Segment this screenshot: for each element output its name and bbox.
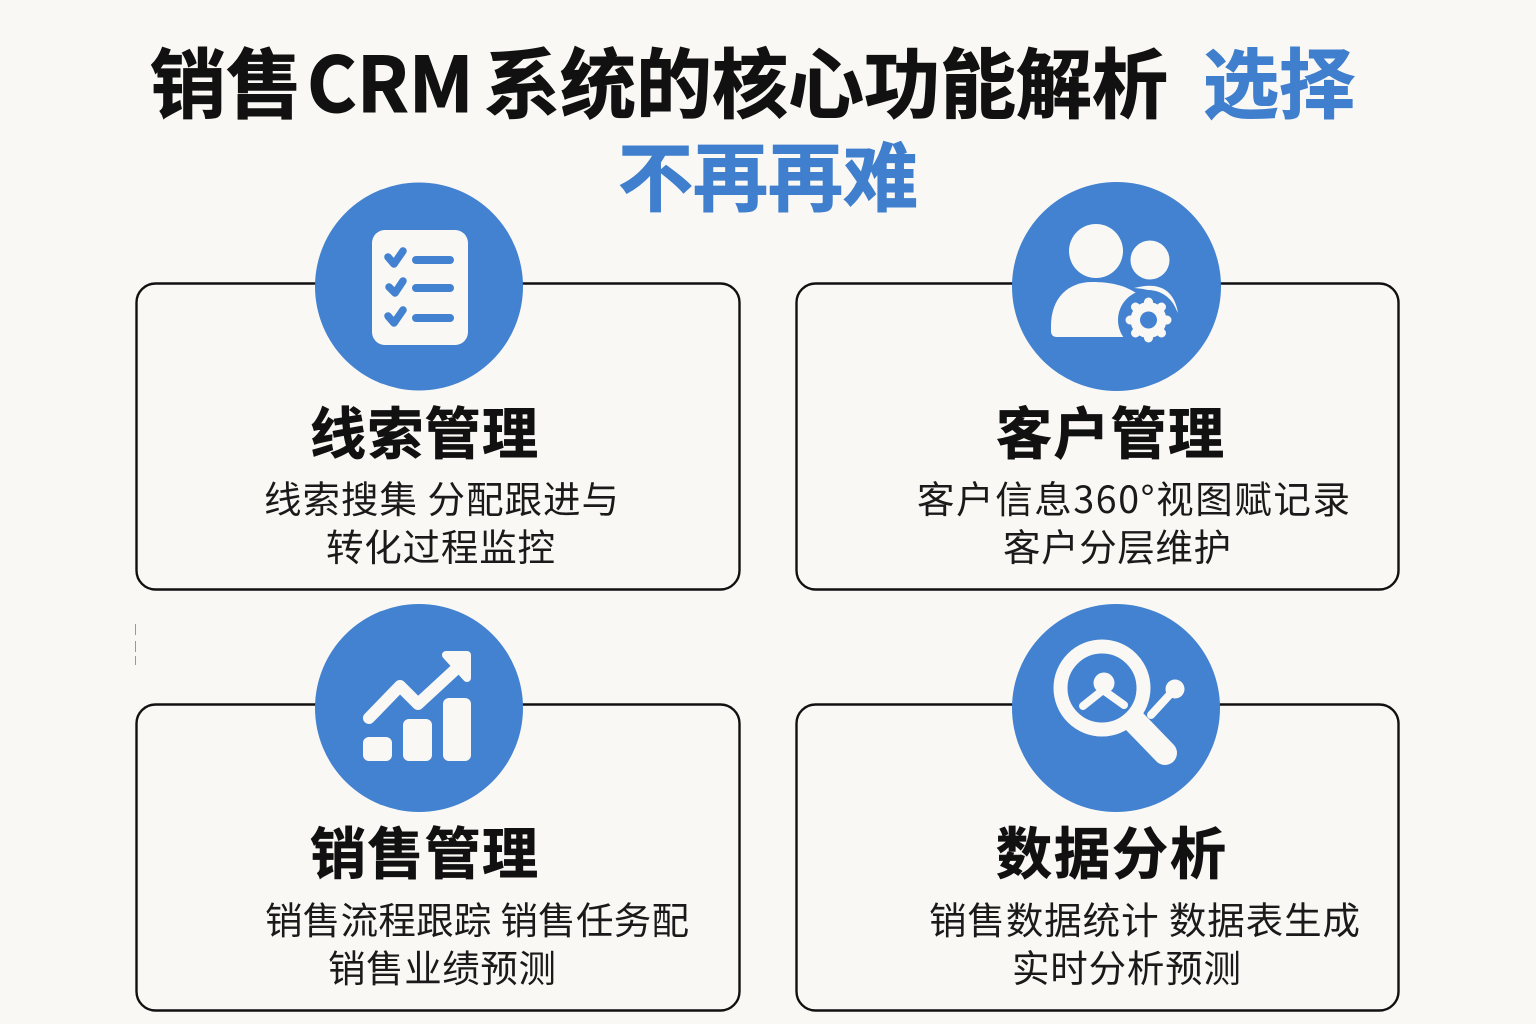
card outline — [796, 704, 1398, 1010]
title: blue word 选择: 选择 — [1203, 24, 1355, 134]
icon: checklist — [315, 182, 523, 390]
heading: 客户管理 — [996, 390, 1224, 471]
description: 销售业绩预测 — [328, 938, 556, 993]
title: black line: CRM — [307, 24, 474, 134]
description — [264, 469, 619, 572]
icon: customers with gear — [1012, 182, 1221, 391]
icon: magnifier analysis — [1012, 604, 1220, 812]
card outline — [136, 284, 740, 590]
description — [929, 890, 1360, 993]
description — [265, 890, 689, 993]
heading: 线索管理 — [310, 390, 538, 471]
description: 线索搜集 分配跟进与 — [264, 469, 619, 524]
description — [917, 469, 1350, 572]
title — [150, 24, 1355, 227]
card outline — [796, 284, 1398, 590]
description: 销售数据统计 数据表生成 — [929, 890, 1360, 945]
description: 销售流程跟踪 销售任务配 — [265, 890, 689, 945]
description: 转化过程监控 — [326, 517, 555, 572]
title: black line: 销售 — [150, 24, 302, 134]
card outline — [136, 704, 740, 1010]
description: 实时分析预测 — [1012, 938, 1241, 993]
title: black line: 系统的核心功能解析 — [484, 24, 1168, 134]
description: 客户分层维护 — [1003, 517, 1231, 572]
icon: growth chart — [315, 604, 523, 812]
description: 客户信息360°视图赋记录 — [917, 469, 1350, 524]
panel: customer management — [796, 182, 1398, 590]
panel: sales management — [136, 604, 740, 1010]
heading: 销售管理 — [310, 810, 538, 891]
panel: data analysis — [796, 604, 1398, 1010]
heading: 数据分析 — [996, 810, 1226, 891]
panel: lead management — [136, 182, 740, 590]
title: blue line 2: 不再再难 — [618, 118, 918, 227]
